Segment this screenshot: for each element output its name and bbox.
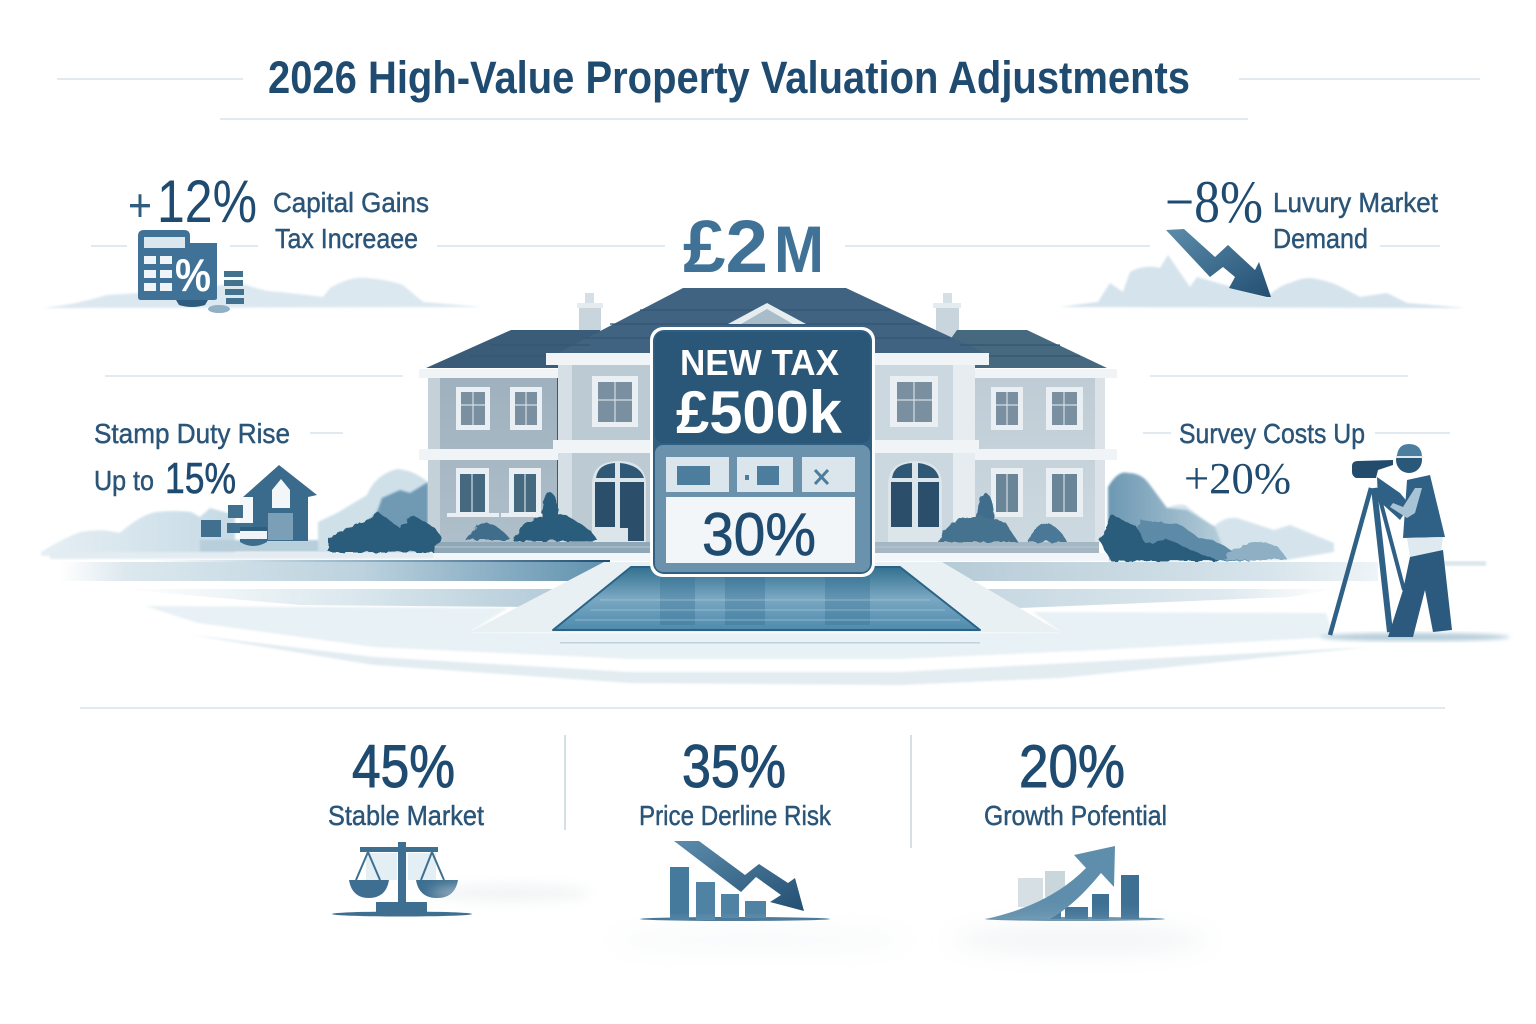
label: Luvury Market Demand: Luvury Market [1273, 187, 1438, 218]
value: 20%: 20% [1019, 733, 1125, 800]
soft shadow under stats [430, 884, 1210, 954]
right wing [975, 378, 1105, 542]
stat: stable market [328, 733, 484, 916]
icon: falling arrow [1166, 229, 1271, 297]
hills: capital gains backdrop [42, 278, 483, 308]
label: Capital Gains Tax Increaee: Capital Gains [273, 187, 429, 218]
label: Stamp Duty Rise: Stamp Duty Rise [94, 418, 290, 449]
label: Luvury Market Demand: Demand [1273, 223, 1368, 254]
centre bays [558, 365, 975, 542]
icon: calculator with percent [138, 230, 244, 313]
label: Luvury Market Demand [1273, 187, 1438, 254]
heading: NEW TAX: NEW TAX [680, 342, 839, 383]
value: +12% [128, 168, 257, 235]
callout: capital gains tax [42, 168, 665, 313]
value: £500k: £500k [676, 379, 843, 446]
windows [447, 376, 1083, 517]
tripod [1330, 488, 1371, 635]
chimneys [577, 293, 961, 339]
central value: £2M: £2 [683, 205, 768, 288]
roofs [426, 288, 1107, 368]
label: Survey Costs Up: Survey Costs Up [1179, 418, 1365, 449]
label: Stable Market: Stable Market [328, 800, 484, 831]
column divider [564, 735, 566, 830]
hills: luxury market backdrop [1060, 255, 1467, 308]
icon: house with coins [201, 465, 317, 546]
pool [470, 562, 1060, 632]
doors [592, 461, 942, 542]
stat: growth potential [984, 733, 1167, 921]
value: +12%: 12% [157, 168, 257, 235]
icon: surveyor with tripod [1330, 444, 1452, 637]
callout: survey costs [1143, 376, 1450, 503]
value: 35%: 35% [682, 733, 786, 800]
cornices and bands [419, 353, 1117, 460]
column divider [910, 735, 912, 848]
value: 45%: 45% [352, 733, 455, 800]
callout: stamp duty [94, 376, 403, 546]
shrubs [328, 492, 1288, 561]
landscape: ground and hills [41, 469, 1510, 685]
label: Capital Gains Tax Increaee [273, 187, 429, 254]
tax panel [650, 327, 875, 577]
house [328, 288, 1288, 561]
label: Price Derline Risk: Price Derline Risk [639, 800, 832, 831]
value box: 30% [666, 497, 855, 568]
label: Up to: Up to [94, 465, 154, 496]
divider rule [80, 707, 1445, 709]
icon tiles [666, 457, 855, 492]
value box: 30%: 30% [702, 501, 816, 568]
value: +12%: + [128, 179, 152, 231]
callout: luxury market demand [1060, 169, 1467, 308]
icon: calculator with percent: % [175, 249, 211, 301]
icon: bars with falling arrow [640, 841, 830, 921]
label: Capital Gains Tax Increaee: Tax Increaee [275, 223, 418, 254]
icon: balance scales [332, 842, 472, 916]
central value: £2M: M [774, 212, 824, 286]
panel header [655, 332, 870, 443]
stat: price decline risk [639, 733, 832, 921]
left wing [428, 378, 558, 542]
surveyor figure [1377, 444, 1452, 637]
value: -8%: −8% [1165, 169, 1263, 235]
icon: bars with rising arrow [985, 846, 1165, 921]
camera [1352, 460, 1393, 478]
terrace [434, 542, 1109, 561]
central value: £2M [683, 205, 1150, 288]
value: 15%: 15% [165, 454, 236, 503]
value: +20%: +20% [1184, 454, 1291, 503]
title: 2026 High-Value Property Valuation Adjustments [268, 52, 1190, 103]
label: Growth Pofential: Growth Pofential [984, 800, 1167, 831]
